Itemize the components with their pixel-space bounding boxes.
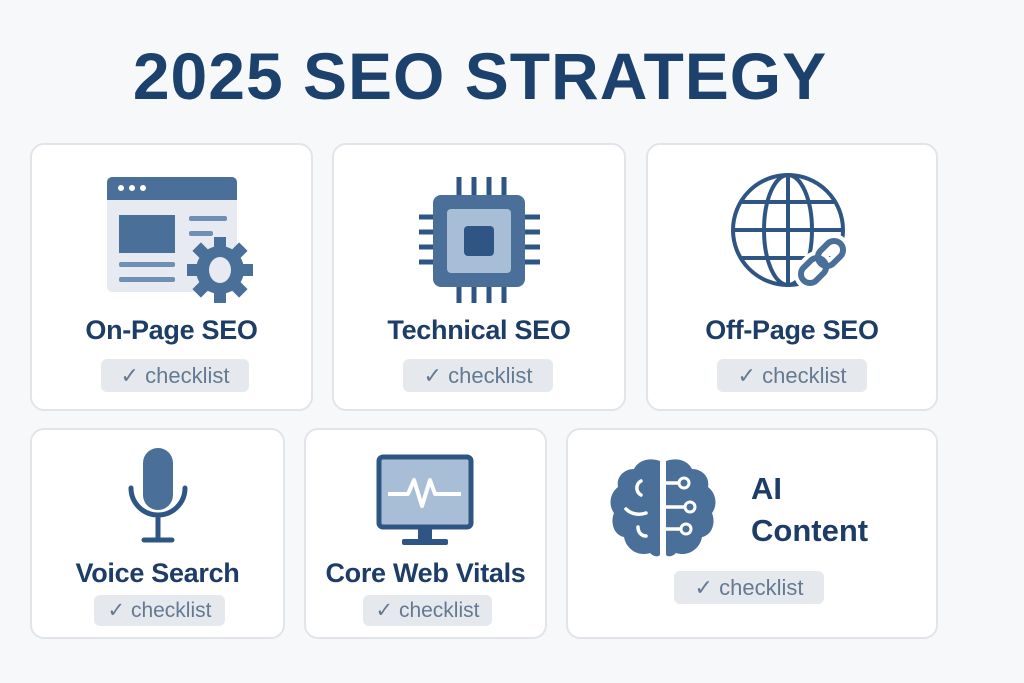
icon: brain: [610, 459, 716, 556]
label: Voice Search: [76, 558, 240, 588]
icon: monitor pulse: [376, 454, 474, 545]
checklist pill: [101, 359, 249, 392]
panel: technical seo: [332, 143, 626, 411]
title: 2025 SEO STRATEGY: [133, 39, 827, 113]
label: Content: [751, 513, 868, 548]
label: AI: [751, 471, 782, 506]
label: Technical SEO: [387, 315, 571, 345]
icon: globe link: [731, 173, 846, 287]
icon: browser gear: [107, 177, 253, 303]
checklist pill: [674, 571, 824, 604]
panel: on-page seo: [30, 143, 313, 411]
panel: core web vitals: [304, 428, 547, 639]
panel: off-page seo: [646, 143, 938, 411]
label: Off-Page SEO: [705, 315, 879, 345]
label: [751, 471, 868, 548]
checklist pill: ✓ checklist: [121, 363, 229, 388]
label: On-Page SEO: [85, 315, 258, 345]
checklist pill: [717, 359, 867, 392]
checklist pill: ✓ checklist: [376, 599, 479, 622]
label: Core Web Vitals: [325, 558, 526, 588]
checklist pill: [403, 359, 553, 392]
panel: voice search: [30, 428, 285, 639]
checklist pill: ✓ checklist: [695, 575, 803, 600]
checklist pill: [94, 595, 225, 626]
checklist pill: ✓ checklist: [738, 363, 846, 388]
checklist pill: [363, 595, 492, 626]
checklist pill: ✓ checklist: [108, 599, 211, 622]
panel: ai content: [566, 428, 938, 639]
checklist pill: ✓ checklist: [424, 363, 532, 388]
icon: microphone: [128, 448, 188, 542]
icon: chip: [419, 177, 540, 303]
